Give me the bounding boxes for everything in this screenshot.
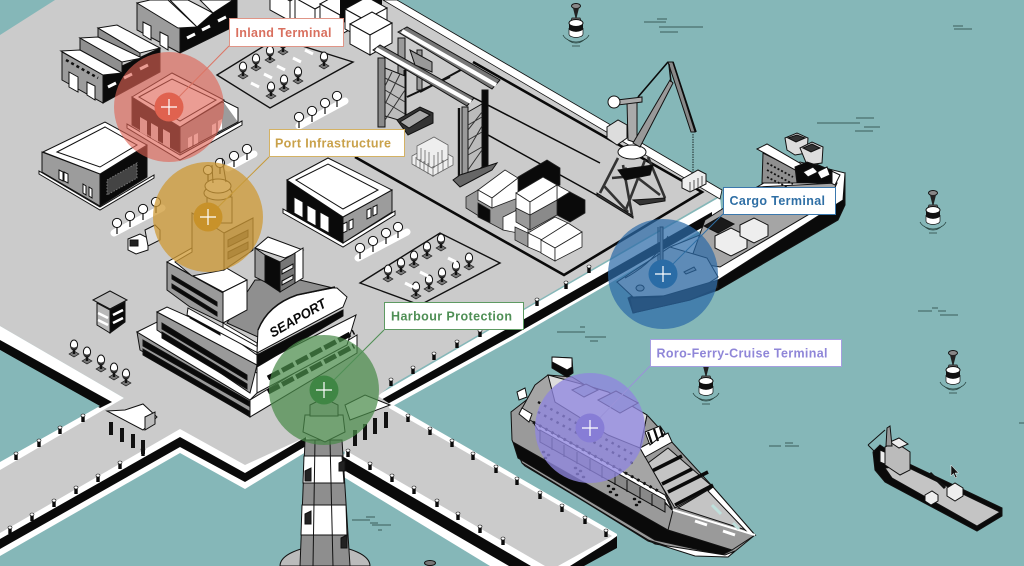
tugboat xyxy=(868,426,1002,531)
hotspot: inland terminal xyxy=(114,46,229,162)
main container pile xyxy=(466,160,585,261)
buoys xyxy=(424,4,966,566)
tree row centre xyxy=(203,144,254,181)
hotspot: port infrastructure xyxy=(153,157,269,272)
warehouse building west xyxy=(39,122,154,210)
seaport headquarters xyxy=(137,237,357,417)
label: roro ferry cruise terminal: Roro-Ferry-Cruise Terminal xyxy=(656,346,828,360)
land xyxy=(0,0,720,566)
label: port infrastructure: Port Infrastructure xyxy=(275,136,391,150)
gantry crane xyxy=(373,27,500,187)
tree row east xyxy=(355,222,407,259)
top container stack xyxy=(270,0,392,55)
cursor xyxy=(951,465,958,478)
quay edge band xyxy=(378,197,722,412)
bollards along quays xyxy=(8,265,608,545)
hotspot: harbour protection xyxy=(269,330,384,445)
small jetty xyxy=(107,395,390,454)
fuel tower xyxy=(175,158,253,276)
label: cargo terminal: Cargo Terminal xyxy=(730,194,825,208)
label: inland terminal: Inland Terminal xyxy=(236,26,332,40)
warehouse group north xyxy=(137,0,237,53)
crate stack xyxy=(412,137,453,177)
label: harbour protection xyxy=(384,302,524,330)
water ripple lines xyxy=(352,19,1024,530)
label: inland terminal xyxy=(230,18,344,46)
lighthouse xyxy=(280,387,370,566)
warehouse group west xyxy=(61,25,160,103)
parking lot north xyxy=(217,38,353,108)
tree row west xyxy=(112,197,162,234)
gate booth xyxy=(93,291,127,333)
left pier lower edge xyxy=(0,429,345,556)
label: cargo terminal xyxy=(724,188,836,214)
cargo ship xyxy=(617,133,845,313)
top quay white strip xyxy=(383,0,722,199)
dock crane xyxy=(597,62,706,218)
tree row north xyxy=(294,91,345,128)
warehouse building centre xyxy=(283,158,395,247)
shrubs near basin xyxy=(69,340,131,386)
sign: SEAPORT: SEAPORT xyxy=(267,295,330,340)
fuel truck xyxy=(128,225,160,254)
yard tracks xyxy=(355,62,702,275)
label: harbour protection: Harbour Protection xyxy=(391,310,512,324)
label: roro ferry cruise terminal xyxy=(650,340,842,366)
label: port infrastructure xyxy=(270,130,404,156)
inland terminal building xyxy=(127,73,242,160)
hotspot: cargo terminal xyxy=(608,214,723,329)
right pier edges xyxy=(342,403,617,566)
cruise ship xyxy=(511,357,755,557)
hotspot: roro ferry cruise terminal xyxy=(535,366,650,483)
parking lot south xyxy=(360,233,500,305)
left inlet basin xyxy=(0,326,124,470)
